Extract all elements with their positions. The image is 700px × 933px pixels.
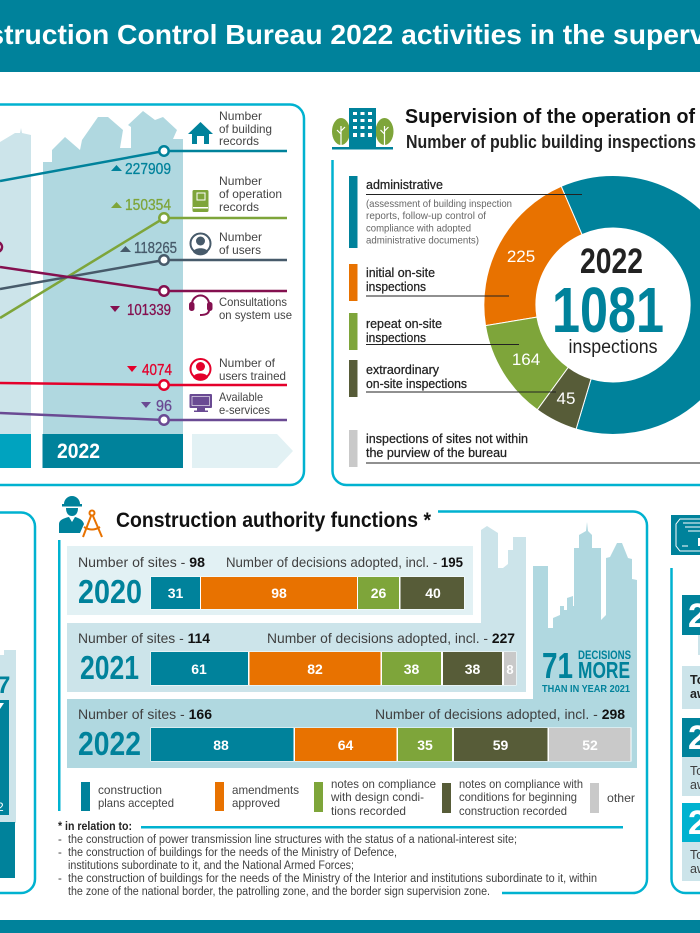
icon: headset [190,296,212,315]
footnote: the construction of power transmission line structures with the status of a national-interest site; [68,834,517,846]
footnote: - [58,873,62,885]
legend: other sites [349,430,700,467]
row 2022: Number of decisions adopted, incl. - 298 [375,706,625,722]
row 2022: 35 [417,737,433,753]
label: e-services [219,390,270,417]
donut centre total [552,242,664,358]
label: operation records [219,174,282,214]
label: e-services: e-services [219,403,270,417]
footnote [58,821,623,898]
value 227909: 227909 [125,161,171,178]
row 2022: Number of sites - 166 [78,706,212,722]
row 2021 [67,623,526,692]
legend: initial: initial on-site [366,266,435,280]
legend: amendments [232,783,299,797]
label: users trained [219,356,286,383]
icon: red user [190,359,210,381]
footnote: * in relation to: [58,821,132,833]
callout: 71 decisions more: 71 [542,645,573,686]
row 2020: 31 [168,585,183,601]
donut chart: 164 [512,350,540,369]
row 2021: Number of decisions adopted, incl. - 227 [267,630,515,646]
row 2020: Number of decisions adopted, incl. - 195 [226,554,463,570]
label: users trained: Number of [219,356,276,370]
icon: certificate [671,515,700,555]
legend: tions recorded [331,804,406,818]
stat block 3 [682,803,700,881]
label: building records: records [219,134,259,148]
value 101339: 101339 [127,302,171,319]
panel: cropped right [671,515,700,893]
value 96 [141,398,172,415]
label: e-services: Available [219,390,263,404]
legend: conditions for beginning [459,790,577,804]
value 101339 [110,302,171,319]
legend: other [607,791,635,805]
legend: extraordinary [349,360,556,397]
footnote: the zone of the national border, the patrolling zone, and the border sign supervision zone. [68,886,490,898]
label: operation records: records [219,200,259,214]
panel: construction authority functions [58,496,647,898]
heading: Supervision of the operation of [405,106,695,128]
row 2022: 88 [213,737,229,753]
label: users: Number [219,230,262,244]
legend: notes on compliance with [459,777,583,791]
icon: monitor [190,394,212,412]
icon: user [190,234,210,255]
arrow [192,434,293,468]
callout: 71 decisions more: MORE [578,657,630,683]
legend: extraordinary: extraordinary [366,363,440,377]
row 2022: 2022 [78,725,141,762]
legend: construction recorded [459,804,567,818]
panel: supervision of public building operation [332,106,700,485]
legend: administrative: compliance with adopted [366,222,471,234]
header band [0,0,700,72]
legend: administrative: administrative [366,178,443,192]
2022 column with skyline [42,111,183,468]
row 2021: 2021 [80,649,139,686]
donut chart [484,175,700,434]
donut centre total: 1081 [552,274,664,346]
legend: other sites: the purview of the bureau [366,446,507,460]
row 2020: 98 [271,585,287,601]
row 2021: 38 [404,661,419,677]
skyline [470,522,637,768]
legend: initial [349,264,509,301]
value 118265: 118265 [134,240,177,257]
label: building records: of building [219,122,272,136]
panel: cropped lower-left [0,512,35,893]
donut chart: 45 [557,389,575,408]
label: users trained: users trained [219,369,286,383]
value 4074: 4074 [142,362,172,379]
legend: initial: inspections [366,280,426,294]
legend: construction [98,783,162,797]
legend: plans accepted [98,796,174,810]
row 2020: Number of sites - 98 [78,554,205,570]
series lines [0,146,287,425]
row 2020: 26 [371,585,386,601]
label: users: of users [219,243,261,257]
row 2020 [67,546,473,615]
label: building records: Number [219,109,262,123]
footnote: - [58,834,62,846]
legend: repeat: inspections [366,331,426,345]
callout: 71 decisions more: DECISIONS [578,648,631,662]
legend: administrative [349,176,582,248]
legend: repeat [349,313,519,350]
row 2021: 38 [465,661,480,677]
label: building records [219,109,272,148]
stat block 2 [682,718,700,796]
icon: building with trees [332,108,394,150]
row 2021: 82 [307,661,323,677]
value 150354: 150354 [125,197,171,214]
legend [81,777,635,818]
2021 column [0,128,31,468]
legend: repeat: repeat on-site [366,317,442,331]
footnote: - [58,847,62,859]
label: consultations: Consultations [219,295,287,309]
label: consultations [219,295,292,322]
legend: administrative: reports, follow-up control of [366,210,486,222]
legend: administrative: (assessment of building inspection [366,198,512,210]
legend: other sites: inspections of sites not within [366,432,528,446]
row 2020: 40 [425,585,441,601]
panel: register statistics line chart [0,104,304,485]
row 2022: 64 [338,737,353,753]
legend: administrative: administrative documents) [366,234,479,246]
callout: 71 decisions more [542,645,631,695]
footnote: the construction of buildings for the needs of the Ministry of the Interior and institutions subordinate to it, within [68,873,597,885]
value 4074 [127,362,172,379]
row 2020: 2020 [78,573,142,610]
donut chart: 225 [507,247,535,266]
legend: notes on compliance [331,777,436,791]
value 96: 96 [156,398,172,415]
icon: book [192,190,208,212]
row 2021: 8 [506,662,514,677]
value 227909 [111,161,171,178]
row 2022: 59 [493,737,508,753]
donut centre total: inspections [568,337,658,358]
legend: with design condi- [330,790,424,804]
icon: engineer and compass [59,496,102,537]
label: operation records: Number [219,174,262,188]
row 2021: Number of sites - 114 [78,630,210,646]
callout: 71 decisions more: THAN IN YEAR 2021 [542,683,630,695]
row 2022: 52 [582,737,598,753]
heading: Construction authority functions * [116,509,432,532]
label: users [219,230,262,257]
label: consultations: on system use [219,308,292,322]
heading [405,106,696,152]
icon: house [188,122,213,144]
footnote: institutions subordinate to it, and the National Armed Forces; [68,860,354,872]
legend: extraordinary: on-site inspections [366,377,467,391]
value 150354 [111,197,171,214]
row 2022 [67,699,637,768]
label: operation records: of operation [219,187,282,201]
footer band [0,920,700,933]
legend: approved [232,796,280,810]
donut centre total: 2022 [580,242,643,281]
row 2021: 61 [191,661,207,677]
2022 column with skyline: 2022 [57,440,100,463]
value 118265 [120,240,177,257]
footnote: the construction of buildings for the needs of the Ministry of Defence, [68,847,397,859]
stat block 1 [682,595,700,709]
